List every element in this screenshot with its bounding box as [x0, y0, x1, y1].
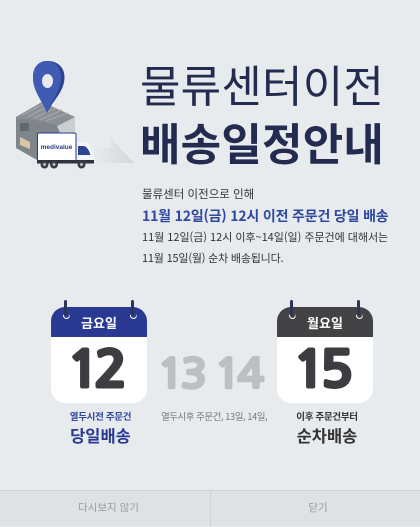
illustration: warehouse, map pin and delivery truck	[16, 61, 134, 168]
faded date 13 14: 14	[214, 354, 260, 394]
button: do not show again: 다시보지 않기	[78, 500, 139, 515]
button: close: 닫기	[308, 500, 328, 515]
title line 1: 물류센터이전	[140, 51, 384, 115]
caption: after noon: 열두시후 주문건, 13일, 14일,	[161, 409, 267, 423]
calendar: friday 12: 12	[67, 346, 121, 395]
map pin	[33, 61, 64, 113]
calendar: monday 15: 15	[293, 346, 347, 395]
highlighted notice: 11월 12일(금) 12시 이전 주문건 당일 배송	[142, 206, 389, 226]
detail text line 1: 11월 12일(금) 12시 이후~14일(일) 주문건에 대해서는	[142, 229, 388, 245]
faded date 13 14	[157, 354, 264, 394]
intro text: 물류센터 이전으로 인해	[142, 186, 254, 202]
detail text line 2: 11월 15일(월) 순차 배송됩니다.	[142, 250, 283, 266]
calendar: monday 15	[277, 300, 373, 403]
title line 2: 배송일정안내	[140, 109, 384, 173]
caption heading: sequential delivery: 순차배송	[297, 423, 357, 447]
caption heading: same-day delivery: 당일배송	[70, 423, 131, 447]
caption: sequential: 이후 주문건부터	[296, 409, 358, 423]
faded date 13 14: 13	[157, 354, 203, 394]
caption: same-day: 열두시전 주문건	[70, 409, 131, 423]
calendar: friday 12: 금요일	[81, 313, 117, 332]
calendar: monday 15: 월요일	[307, 313, 343, 332]
warehouse	[16, 102, 75, 160]
bottom bar	[0, 490, 420, 526]
delivery truck: medivalue	[41, 144, 73, 151]
arrow	[92, 138, 134, 163]
calendar: friday 12	[51, 300, 147, 403]
